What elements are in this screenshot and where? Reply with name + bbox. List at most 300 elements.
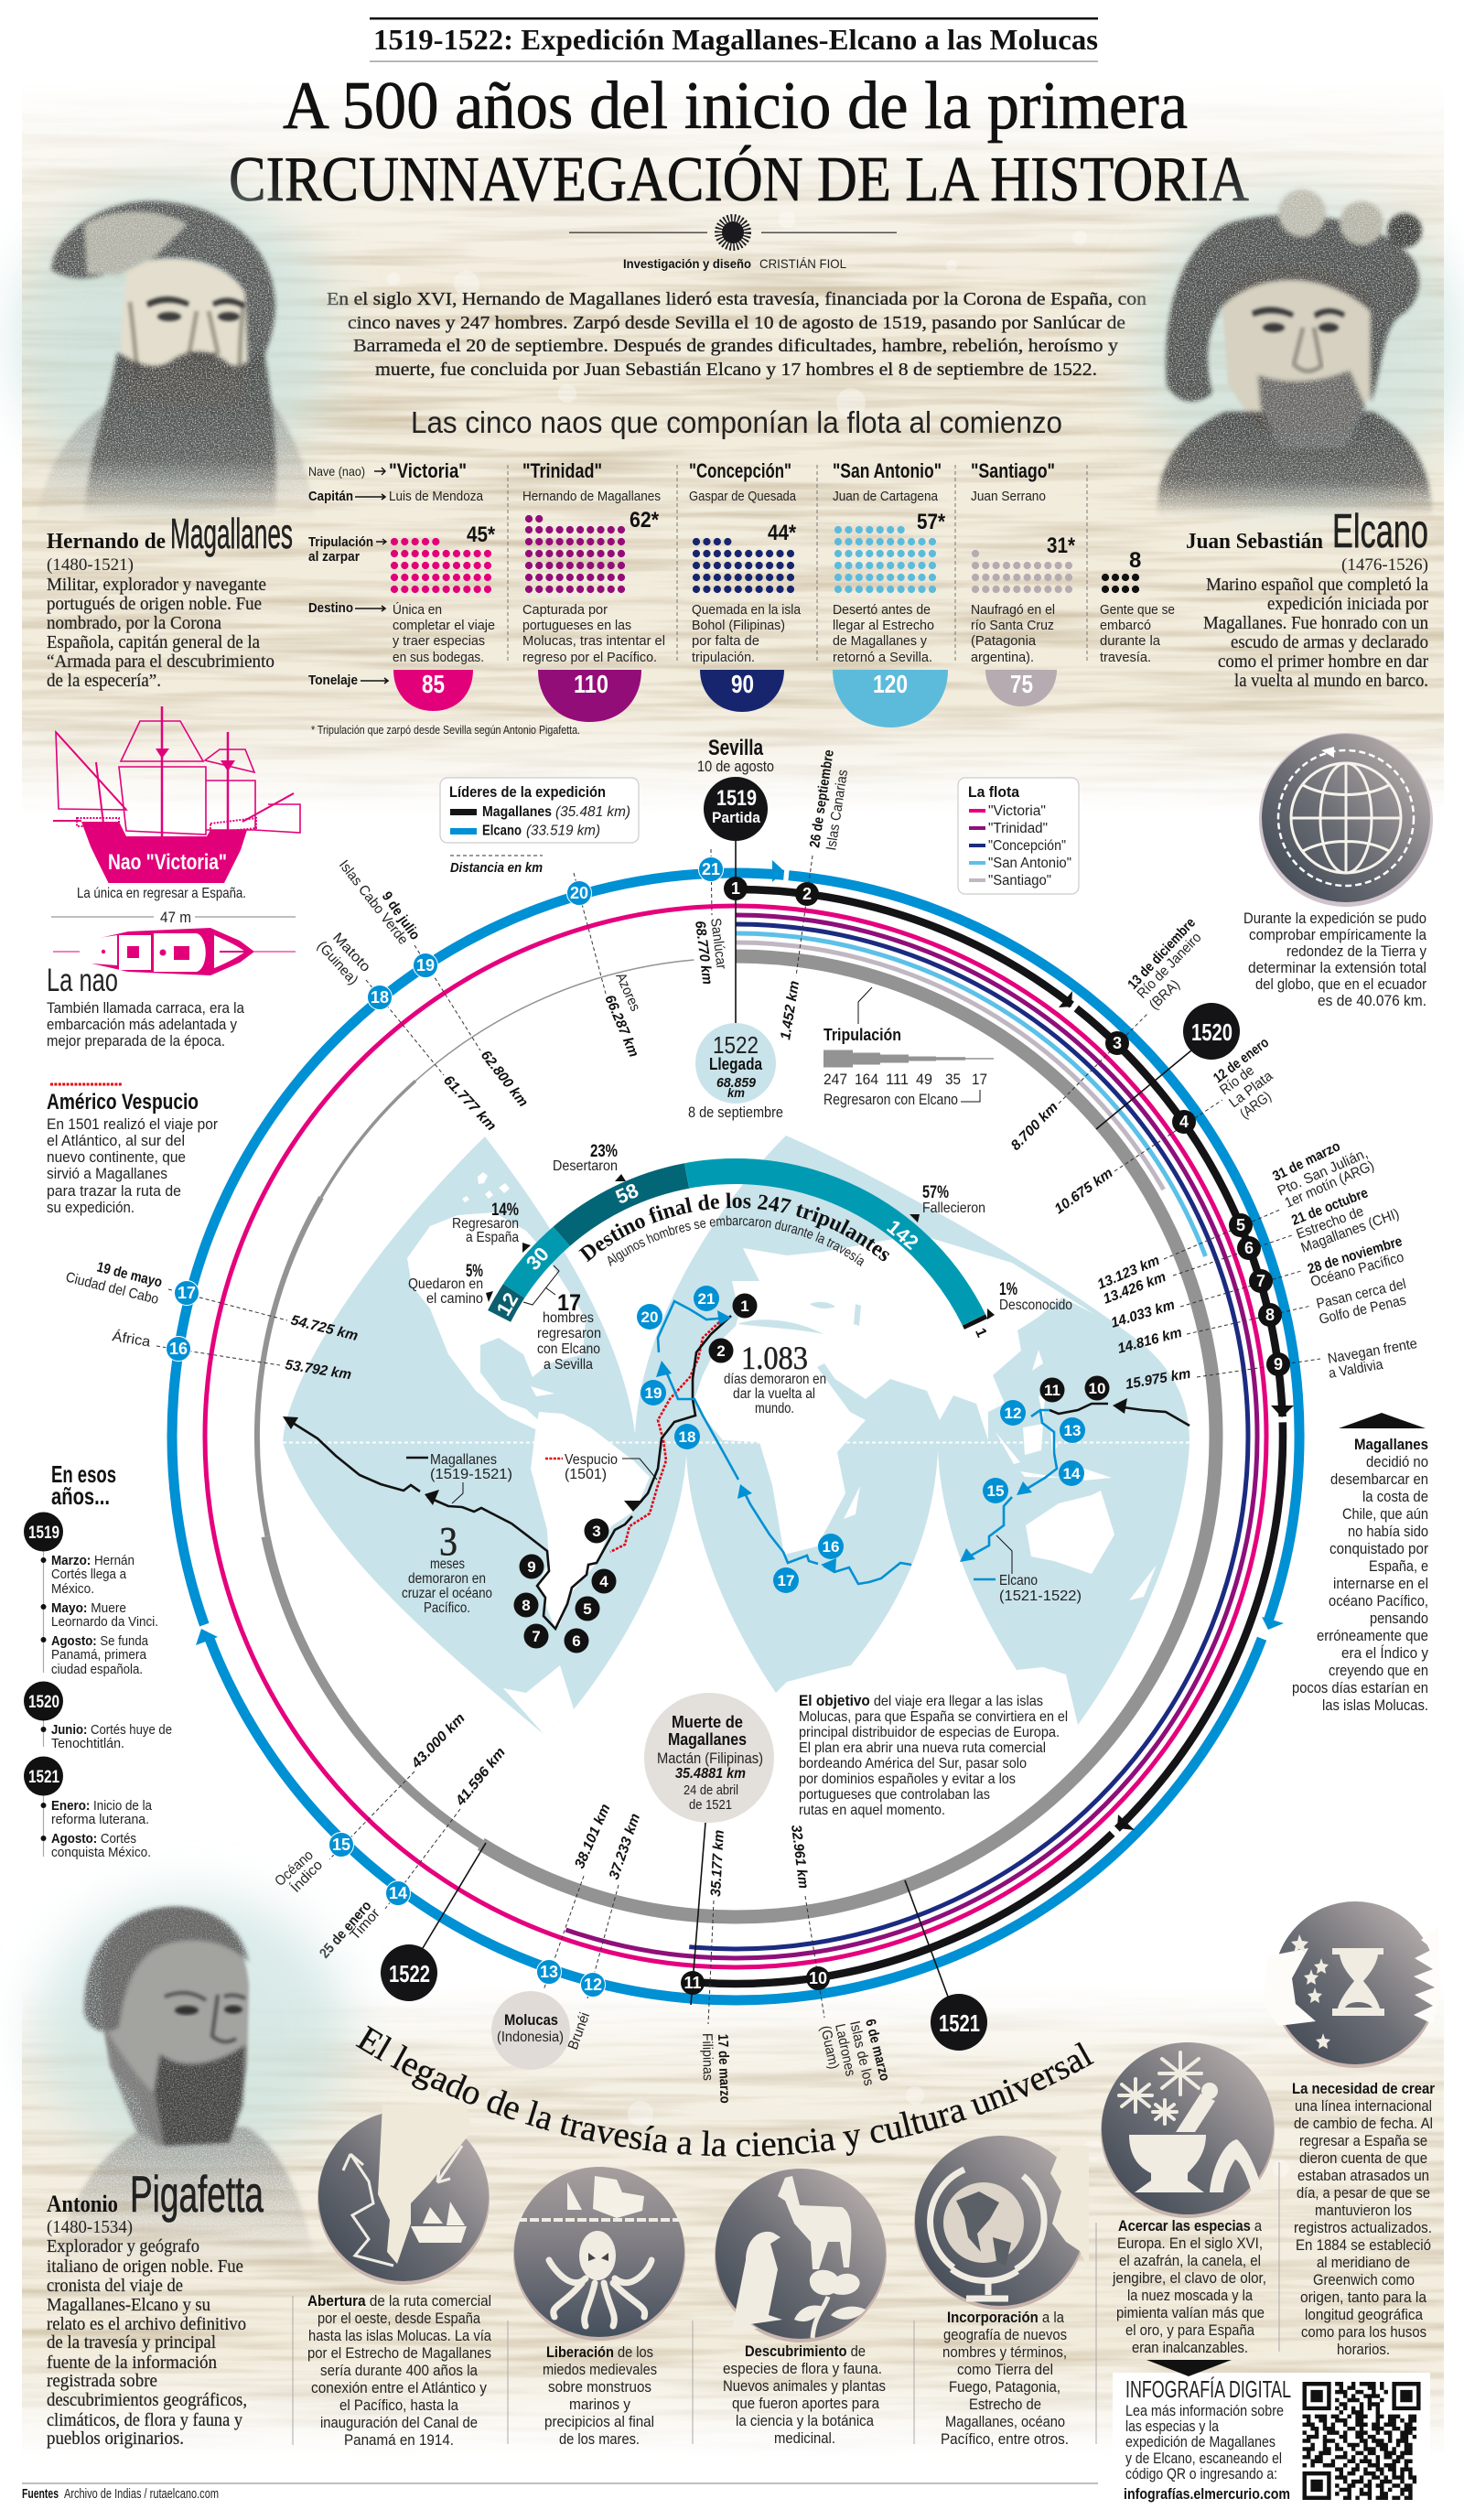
- legend: Elcano route: (1521-1522): [999, 1588, 1082, 1604]
- text: necesidad: dieron cuenta de que: [1299, 2150, 1427, 2167]
- callout: 3 months: 3: [439, 1519, 458, 1564]
- text block: Américo Vespucio: Américo Vespucio: [47, 1090, 199, 1115]
- chart: crew reduction: 111: [886, 1072, 909, 1088]
- labels: route stops bottom: 43.000 km: [408, 1710, 468, 1772]
- text: Magallanes decision: decidió no: [1366, 1454, 1428, 1470]
- map markers: Elcano: 14: [1063, 1465, 1081, 1482]
- bio: Pigafetta: Explorador y geógrafo: [47, 2236, 199, 2256]
- callout: 17 men: hombres: [543, 1310, 594, 1326]
- row labels: Capitán: [308, 489, 353, 504]
- globe icon: [1259, 733, 1433, 907]
- labels: route stops left side: Ciudad del Cabo: [64, 1269, 160, 1308]
- route: Elcano: [658, 1301, 1057, 1584]
- chart: crew reduction: 49: [916, 1072, 932, 1088]
- text: globe note: redondez de la Tierra y: [1286, 943, 1427, 960]
- 1522 arrival: [688, 1023, 783, 1121]
- legend: leaders: [440, 778, 639, 843]
- destinies: Molucas, tras intentar el: [522, 634, 665, 649]
- arc labels: 1%: [999, 1280, 1017, 1299]
- destinies: en sus bodegas.: [393, 651, 484, 665]
- QR code: [1303, 2382, 1421, 2500]
- text: especias: el azafrán, la canela, el: [1119, 2253, 1261, 2269]
- 1522 arrival: Llegada: [709, 1055, 763, 1073]
- bio: Pigafetta: relato es el archivo definitivo: [47, 2314, 246, 2334]
- text: globe note: comprobar empíricamente la: [1249, 927, 1427, 943]
- year 1521: 1521: [939, 2009, 980, 2037]
- labels: route stops right side: La Plata: [1226, 1068, 1276, 1111]
- legend: Vespucio route: Vespucio: [565, 1452, 618, 1468]
- bio: Elcano: como el primer hombre en dar: [1218, 652, 1428, 672]
- panel: in those years: años...: [51, 1482, 110, 1510]
- callout: 1083 days: 1.083: [741, 1340, 808, 1376]
- destinies: Quemada en la isla: [692, 603, 802, 618]
- arc values: [491, 1179, 989, 1340]
- legend: Elcano route: Elcano: [999, 1573, 1038, 1588]
- bio: Pigafetta: descubrimientos geográficos,: [47, 2390, 247, 2410]
- text: apertura: el Pacífico, hasta la: [339, 2397, 459, 2414]
- arc title: Algunos hombres se embarcaron durante la travesía: [608, 1215, 864, 1266]
- bio: Pigafetta: italiano de origen noble. Fue: [47, 2256, 243, 2277]
- panel: in those years: Marzo: Hernán: [51, 1553, 135, 1568]
- labels: route stops bottom: [272, 1710, 892, 2104]
- map markers: Elcano: 17: [778, 1572, 794, 1589]
- labels: route stops right side: Navegan frente: [1327, 1336, 1418, 1367]
- callout: death of Magallanes: 24 de abril: [684, 1782, 738, 1798]
- text: necesidad: mantuvieron los: [1315, 2202, 1412, 2219]
- arc labels: [408, 1142, 1072, 1319]
- ring arrowheads: [196, 860, 1294, 1830]
- intro text: Barrameda el 20 de septiembre. Después de grandes dificultades, hambre, rebelión, heroísmo y: [353, 336, 1118, 356]
- text: objective: El plan era abrir una nueva ruta comercial: [799, 1740, 1046, 1756]
- row labels: Nave (nao): [308, 464, 365, 479]
- chart: crew reduction: 17: [972, 1072, 987, 1088]
- text: objective: portugueses que controlaban las: [799, 1787, 990, 1803]
- labels: route stops left side: (Guinea): [314, 938, 361, 988]
- text: especias: el oro, y para España: [1125, 2322, 1255, 2339]
- labels: route stops left side: 19 de mayo: [95, 1259, 164, 1291]
- labels: route stops right side: 13.123 km: [1095, 1253, 1162, 1293]
- crew dots: Trinidad: [529, 519, 621, 589]
- map markers: Elcano: 12: [1005, 1405, 1021, 1422]
- ring markers: Magallanes: 6: [1244, 1239, 1254, 1257]
- legend: fleet: "Victoria": [988, 803, 1046, 819]
- text: apertura: por el oeste, desde España: [318, 2310, 481, 2327]
- 1522 arrival: 8 de septiembre: [688, 1104, 783, 1121]
- intro text: cinco naves y 247 hombres. Zarpó desde Sevilla el 10 de agosto de 1519, pasando por Sanlúcar de: [348, 313, 1125, 333]
- chart: crew reduction: 35: [945, 1072, 961, 1088]
- panel: in those years: Leornardo da Vinci.: [51, 1614, 158, 1630]
- bio: Elcano: Magallanes. Fue honrado con un: [1203, 613, 1428, 633]
- text: especias: Acercar las especias a: [1118, 2218, 1263, 2235]
- ring markers: Elcano: 14: [389, 1884, 407, 1902]
- labels: route stops left side: Matoto: [329, 930, 373, 975]
- panel: digital infographic: expedición de Magallanes: [1125, 2434, 1276, 2450]
- arc labels: Fallecieron: [922, 1201, 985, 1216]
- ring markers: Magallanes: 5: [1236, 1216, 1245, 1234]
- text block: la nao: También llamada carraca, era la: [47, 1000, 245, 1017]
- ship names: "Concepción": [689, 459, 791, 482]
- bio: Pigafetta: Pigafetta: [130, 2165, 264, 2223]
- labels: route stops left side: África: [111, 1329, 152, 1351]
- text: necesidad: como para los husos: [1301, 2324, 1426, 2341]
- equator: [283, 1442, 1190, 1444]
- text block: Américo Vespucio: su expedición.: [47, 1200, 135, 1216]
- arc values: 30: [522, 1243, 554, 1275]
- text: descubrimiento: Nuevos animales y plantas: [723, 2378, 886, 2395]
- labels: route stops right side: 12 de enero: [1211, 1035, 1272, 1086]
- callout: death of Magallanes: Magallanes: [668, 1730, 747, 1749]
- labels: route stops left side: Sanlúcar: [707, 917, 729, 970]
- text: necesidad: [1279, 2081, 1436, 2358]
- text: Magallanes decision: desembarcar en: [1330, 1471, 1428, 1488]
- text: globe note: Durante la expedición se pudo: [1243, 910, 1426, 927]
- labels: route stops bottom: 6 de marzo: [862, 2018, 892, 2083]
- byline: [623, 256, 846, 271]
- callout: 1083 days: [724, 1340, 826, 1416]
- text: Magallanes decision: [1292, 1413, 1429, 1714]
- bio: Magallanes: de la especería”.: [47, 671, 161, 691]
- labels: route stops bottom: Brunéi: [565, 2010, 593, 2052]
- legend: fleet: "Concepción": [988, 838, 1066, 854]
- bio: Pigafetta: climáticos, de flora y fauna y: [47, 2410, 243, 2430]
- bio: Pigafetta: pueblos originarios.: [47, 2428, 184, 2449]
- callout: 17 men: [523, 1265, 601, 1373]
- arc values: 1: [972, 1326, 989, 1340]
- measure: 47 m: 47 m: [160, 909, 191, 926]
- text: objective: [799, 1692, 1068, 1818]
- arc title: Destino final de los 247 tripulantes: [578, 1193, 889, 1263]
- callout: 17 men: regresaron: [537, 1326, 601, 1341]
- year 1521: [931, 1994, 987, 2051]
- text: liberación: de los mares.: [559, 2431, 640, 2448]
- text: incorporación: Incorporación a la: [947, 2310, 1065, 2326]
- panel: in those years: Junio: Cortés huye de: [51, 1722, 172, 1738]
- text: especias: la nuez moscada y la: [1127, 2288, 1254, 2304]
- legend: Vespucio route: (1501): [565, 1467, 607, 1482]
- text: objective: por dominios españoles y evitar a los: [799, 1772, 1016, 1787]
- destinies: Gente que se: [1100, 603, 1175, 618]
- bio: Pigafetta: de la travesía y principal: [47, 2332, 216, 2353]
- map markers: Elcano: 19: [645, 1384, 662, 1402]
- year 1522: [381, 1944, 437, 2001]
- bio: Elcano: Marino español que completó la: [1206, 575, 1428, 595]
- legend: Magallanes route: [406, 1452, 512, 1503]
- map markers: Elcano: 13: [1064, 1422, 1081, 1439]
- panel: digital infographic: infografías.elmercurio.com: [1124, 2485, 1290, 2503]
- header: top rules and kicker: 1519-1522: Expedición Magallanes-Elcano a las Molucas: [373, 23, 1098, 56]
- labels: route stops right side: 13 de diciembre: [1125, 915, 1199, 993]
- callout: 3 months: demoraron en: [408, 1571, 486, 1587]
- year 1520: [1183, 1003, 1240, 1060]
- text: incorporación: Fuego, Patagonia,: [949, 2379, 1060, 2396]
- labels: route stops right side: 8.700 km: [1008, 1099, 1061, 1154]
- year 1522: 1522: [389, 1960, 430, 1987]
- text block: Américo Vespucio: [47, 1084, 218, 1216]
- title: A 500 años del inicio de la primera: [283, 69, 1188, 144]
- text: Magallanes decision: océano Pacífico,: [1329, 1593, 1428, 1610]
- callout: 3 months: meses: [430, 1556, 465, 1572]
- labels: route stops bottom: 17 de marzo: [715, 2034, 733, 2104]
- map markers: Magallanes: [514, 1294, 1109, 1653]
- legend: Magallanes route: (1519-1521): [430, 1467, 512, 1482]
- callout: 17 men: 17: [557, 1290, 581, 1316]
- text block: Américo Vespucio: nuevo continente, que: [47, 1149, 186, 1166]
- legend: leaders: (33.519 km): [526, 824, 600, 838]
- panel: in those years: 1519: [28, 1524, 59, 1543]
- ring markers: Elcano: 21: [702, 860, 720, 878]
- labels: route stops bottom: Océano: [272, 1847, 317, 1890]
- crew dots: Concepción: [696, 542, 791, 589]
- labels: route stops right side: Golfo de Penas: [1318, 1292, 1408, 1328]
- arc values: 142: [883, 1215, 923, 1255]
- labels: route stops bottom: Filipinas: [699, 2033, 716, 2081]
- text: apertura: conexión entre el Atlántico y: [311, 2380, 488, 2396]
- crew numbers: 8: [1129, 548, 1141, 573]
- labels: route stops bottom: Timor: [347, 1906, 383, 1944]
- destinies: (Patagonia: [971, 634, 1037, 649]
- icon: sun ornament: [569, 219, 897, 246]
- captains: Juan Serrano: [971, 489, 1046, 504]
- callout: death of Magallanes: 35.4881 km: [675, 1766, 746, 1782]
- legend: fleet: "Santiago": [988, 873, 1051, 888]
- world map: [283, 1136, 1190, 1734]
- text block: la nao: [47, 963, 245, 1050]
- tonnage half circles: [393, 670, 1057, 727]
- text: Magallanes decision: era el Índico y: [1341, 1644, 1429, 1662]
- text: liberación: Liberación de los: [546, 2344, 653, 2361]
- legend: Vespucio route: [545, 1452, 657, 1482]
- chart: crew reduction: Regresaron con Elcano: [824, 1092, 958, 1108]
- text: descubrimiento: [693, 2321, 886, 2447]
- ring markers: Elcano: 18: [371, 988, 389, 1007]
- panel: in those years: Mayo: Muere: [51, 1600, 126, 1616]
- ring markers: Magallanes: 3: [1113, 1034, 1122, 1052]
- ship names: "San Antonio": [833, 459, 942, 482]
- bio: Elcano: (1476-1526): [1341, 555, 1428, 575]
- legend: leaders: Magallanes: [482, 804, 552, 820]
- panel: in those years: [24, 1460, 172, 1860]
- row labels: Destino: [308, 600, 353, 616]
- destinies: Única en: [393, 602, 442, 618]
- legend: fleet: La flota: [968, 783, 1019, 801]
- text: Magallanes decision: la costa de: [1362, 1489, 1428, 1505]
- row labels: Tripulación: [308, 534, 373, 550]
- ship names: "Santiago": [971, 459, 1055, 482]
- labels: route stops right side: Pto. San Julián,: [1276, 1146, 1370, 1200]
- row labels: al zarpar: [308, 549, 360, 565]
- ring markers: Elcano: 16: [169, 1340, 188, 1358]
- text: apertura: inauguración del Canal de: [320, 2415, 478, 2431]
- 1522 arrival: 68.859: [716, 1075, 757, 1091]
- destinies: portugueses en las: [522, 619, 631, 633]
- ring: crew: [59, 760, 1412, 2113]
- text: necesidad: estaban atrasados un: [1297, 2168, 1429, 2184]
- heading: legacy: El legado de la travesía a la ciencia y cultura universal: [355, 2026, 1094, 2157]
- row labels: [308, 464, 388, 688]
- text block: la nao: La nao: [47, 963, 118, 998]
- ring markers: Magallanes: 2: [802, 885, 812, 903]
- labels: route stops right side: Océano Pacífico: [1309, 1249, 1405, 1290]
- text: Magallanes decision: pocos días estarían en: [1292, 1680, 1428, 1696]
- bio: Magallanes: Magallanes: [170, 510, 293, 557]
- text: descubrimiento: Descubrimiento de: [745, 2343, 866, 2360]
- callout: death of Magallanes: de 1521: [689, 1797, 732, 1813]
- labels: route stops right side: Río de: [1217, 1062, 1257, 1098]
- labels: route stops right side: (ARG): [1237, 1089, 1275, 1122]
- caption: only ship that returned: La única en regresar a España.: [77, 886, 246, 901]
- ring markers: Magallanes: 9: [1274, 1355, 1283, 1373]
- map markers: Elcano: 16: [823, 1538, 839, 1556]
- map markers: Magallanes: 7: [532, 1628, 541, 1645]
- labels: route stops left side: [64, 857, 729, 1383]
- text: liberación: precipicios al final: [544, 2414, 654, 2430]
- labels: route stops right side: 26 de septiembre: [807, 748, 837, 849]
- text: liberación: marinos y: [569, 2396, 631, 2413]
- text: descubrimiento: que fueron aportes para: [732, 2396, 880, 2412]
- text block: la nao: embarcación más adelantada y: [47, 1017, 238, 1033]
- captains: Luis de Mendoza: [389, 489, 484, 504]
- callout: 1083 days: días demoraron en: [724, 1372, 826, 1387]
- text: especias: pimienta valían más que: [1116, 2305, 1265, 2321]
- chart: voyage rings: [59, 760, 1412, 2113]
- callout: death of Magallanes: [644, 1693, 774, 1823]
- arc values: 12: [491, 1288, 522, 1319]
- crew numbers: 44*: [768, 521, 797, 545]
- panel: digital infographic: y de Elcano, escaneando el: [1125, 2450, 1282, 2467]
- text: apertura: por el Estrecho de Magallanes: [307, 2345, 491, 2362]
- destinies: argentina).: [971, 651, 1034, 665]
- text block: Américo Vespucio: para trazar la ruta de: [47, 1183, 181, 1200]
- labels: route stops left side: 54.725 km: [289, 1312, 360, 1344]
- legend: Magallanes route: Magallanes: [430, 1452, 497, 1468]
- ring: Victoria: [205, 906, 1266, 1967]
- destinies: Bohol (Filipinas): [692, 619, 785, 633]
- labels: route stops bottom: 38.101 km: [572, 1802, 614, 1871]
- map markers: Magallanes: 11: [1044, 1382, 1060, 1399]
- text: globe note: es de 40.076 km.: [1318, 993, 1426, 1009]
- panel: digital infographic: [1113, 2360, 1430, 2520]
- panel: in those years: México.: [51, 1581, 94, 1597]
- labels: route stops right side: 15.975 km: [1125, 1366, 1192, 1393]
- bio: Pigafetta: (1480-1534): [47, 2217, 133, 2237]
- destinies: embarcó: [1100, 619, 1151, 633]
- legend: leaders: (35.481 km): [555, 804, 630, 820]
- ring markers: Magallanes: 11: [684, 1974, 702, 1992]
- route: Vespucio: [610, 1322, 719, 1552]
- arc labels: a España: [466, 1230, 519, 1245]
- text: incorporación: Estrecho de: [969, 2396, 1041, 2413]
- labels: route stops right side: Magallanes (CHI): [1299, 1206, 1402, 1256]
- ring markers: Magallanes: 7: [1256, 1272, 1265, 1290]
- text: Magallanes decision: erróneamente que: [1317, 1628, 1428, 1644]
- text: incorporación: Pacífico, entre otros.: [941, 2431, 1069, 2448]
- crew dots: Victoria: [394, 542, 488, 589]
- bio: Pigafetta: fuente de la información: [47, 2353, 217, 2373]
- route: Magallanes: [285, 1316, 1190, 1629]
- bio: Magallanes: [47, 510, 293, 691]
- ring markers: Elcano: 17: [178, 1284, 196, 1302]
- map markers: Magallanes: 2: [716, 1342, 726, 1360]
- labels: route stops left side: Islas Cabo Verde: [336, 857, 411, 948]
- labels: route stops left side: Azores: [612, 971, 643, 1014]
- text: apertura: Panamá en 1914.: [344, 2432, 454, 2449]
- crew numbers: 31*: [1047, 533, 1076, 558]
- text: apertura: sería durante 400 años la: [320, 2363, 479, 2379]
- parchment background: bottom: [22, 1986, 1444, 2457]
- text: Magallanes decision: España, e: [1369, 1558, 1428, 1575]
- crew numbers: 57*: [917, 510, 946, 534]
- ship names: [389, 459, 1055, 482]
- text: Magallanes decision: Chile, que aún: [1342, 1506, 1428, 1523]
- tonnage half circles: 110: [574, 670, 608, 698]
- legend: fleet: [958, 778, 1079, 894]
- text: necesidad: longitud geográfica: [1305, 2307, 1424, 2323]
- footer: sources: [22, 2483, 1098, 2502]
- text block: Américo Vespucio: En 1501 realizó el viaje por: [47, 1116, 218, 1133]
- labels: route stops bottom: Ladrones: [832, 2022, 858, 2078]
- text: descubrimiento: medicinal.: [774, 2430, 835, 2447]
- footer: sources: Archivo de Indias / rutaelcano.com: [64, 2486, 219, 2502]
- chart: crew reduction: 164: [855, 1072, 878, 1088]
- labels: route stops right side: 21 de octubre: [1289, 1185, 1371, 1229]
- map markers: Magallanes: 8: [522, 1597, 531, 1614]
- text: liberación: [508, 2321, 657, 2448]
- labels: route stops right side: Islas Canarias: [824, 769, 851, 852]
- text: incorporación: Magallanes, océano: [945, 2414, 1065, 2430]
- text: necesidad: de cambio de fecha. Al: [1294, 2116, 1433, 2132]
- map markers: Elcano: 21: [698, 1290, 715, 1308]
- callout: 17 men: a Sevilla: [544, 1357, 593, 1373]
- title: [229, 69, 1249, 215]
- tonnage half circles: 75: [1010, 670, 1033, 698]
- arc labels: Desconocido: [999, 1298, 1072, 1313]
- text: liberación: miedos medievales: [543, 2362, 657, 2378]
- destinies: y traer especias: [393, 634, 485, 649]
- labels: route stops right side: Río de Janeiro: [1135, 930, 1204, 1002]
- text: objective: principal distribuidor de especias de Europa.: [799, 1725, 1060, 1740]
- labels: route stops bottom: 32.961 km: [788, 1824, 811, 1890]
- text: incorporación: como Tierra del: [957, 2362, 1053, 2378]
- icon: spices: [1101, 2042, 1275, 2218]
- text: descubrimiento: especies de flora y fauna.: [723, 2361, 882, 2377]
- text: necesidad: origen, tanto para la: [1300, 2289, 1427, 2306]
- text block: la nao: mejor preparada de la época.: [47, 1033, 225, 1050]
- panel: in those years: En esos: [51, 1460, 116, 1488]
- destinies: retornó a Sevilla.: [833, 651, 932, 665]
- intro text: [327, 289, 1146, 380]
- map markers: Magallanes: 10: [1089, 1380, 1105, 1397]
- Sevilla departure: 10 de agosto: [697, 759, 774, 775]
- heading: fleet: Las cinco naos que componían la flota al comienzo: [411, 405, 1062, 439]
- crew dots: others: [1105, 577, 1136, 589]
- portrait: Pigafetta: [37, 1894, 348, 2269]
- icon: trade route: [318, 2105, 490, 2285]
- ring: Elcano: [122, 823, 1350, 2051]
- bio: Pigafetta: Magallanes-Elcano y su: [47, 2295, 210, 2315]
- text: especias: Europa. En el siglo XVI,: [1117, 2235, 1263, 2252]
- text: incorporación: geografía de nuevos: [943, 2327, 1067, 2343]
- ring markers: Elcano: 13: [540, 1963, 558, 1981]
- text: incorporación: [914, 2310, 1069, 2448]
- labels: route stops left side: 9 de julio: [379, 889, 423, 942]
- illustration: nao top view: [53, 928, 296, 975]
- bio: Magallanes: (1480-1521): [47, 555, 134, 575]
- crew dots: Santiago: [975, 554, 1069, 589]
- panel: digital infographic: Lea más información sobre: [1125, 2403, 1284, 2419]
- callout: 3 months: Pacífico.: [424, 1600, 470, 1616]
- legend: fleet: "Trinidad": [988, 821, 1048, 836]
- ring markers: Magallanes: [681, 877, 1290, 1995]
